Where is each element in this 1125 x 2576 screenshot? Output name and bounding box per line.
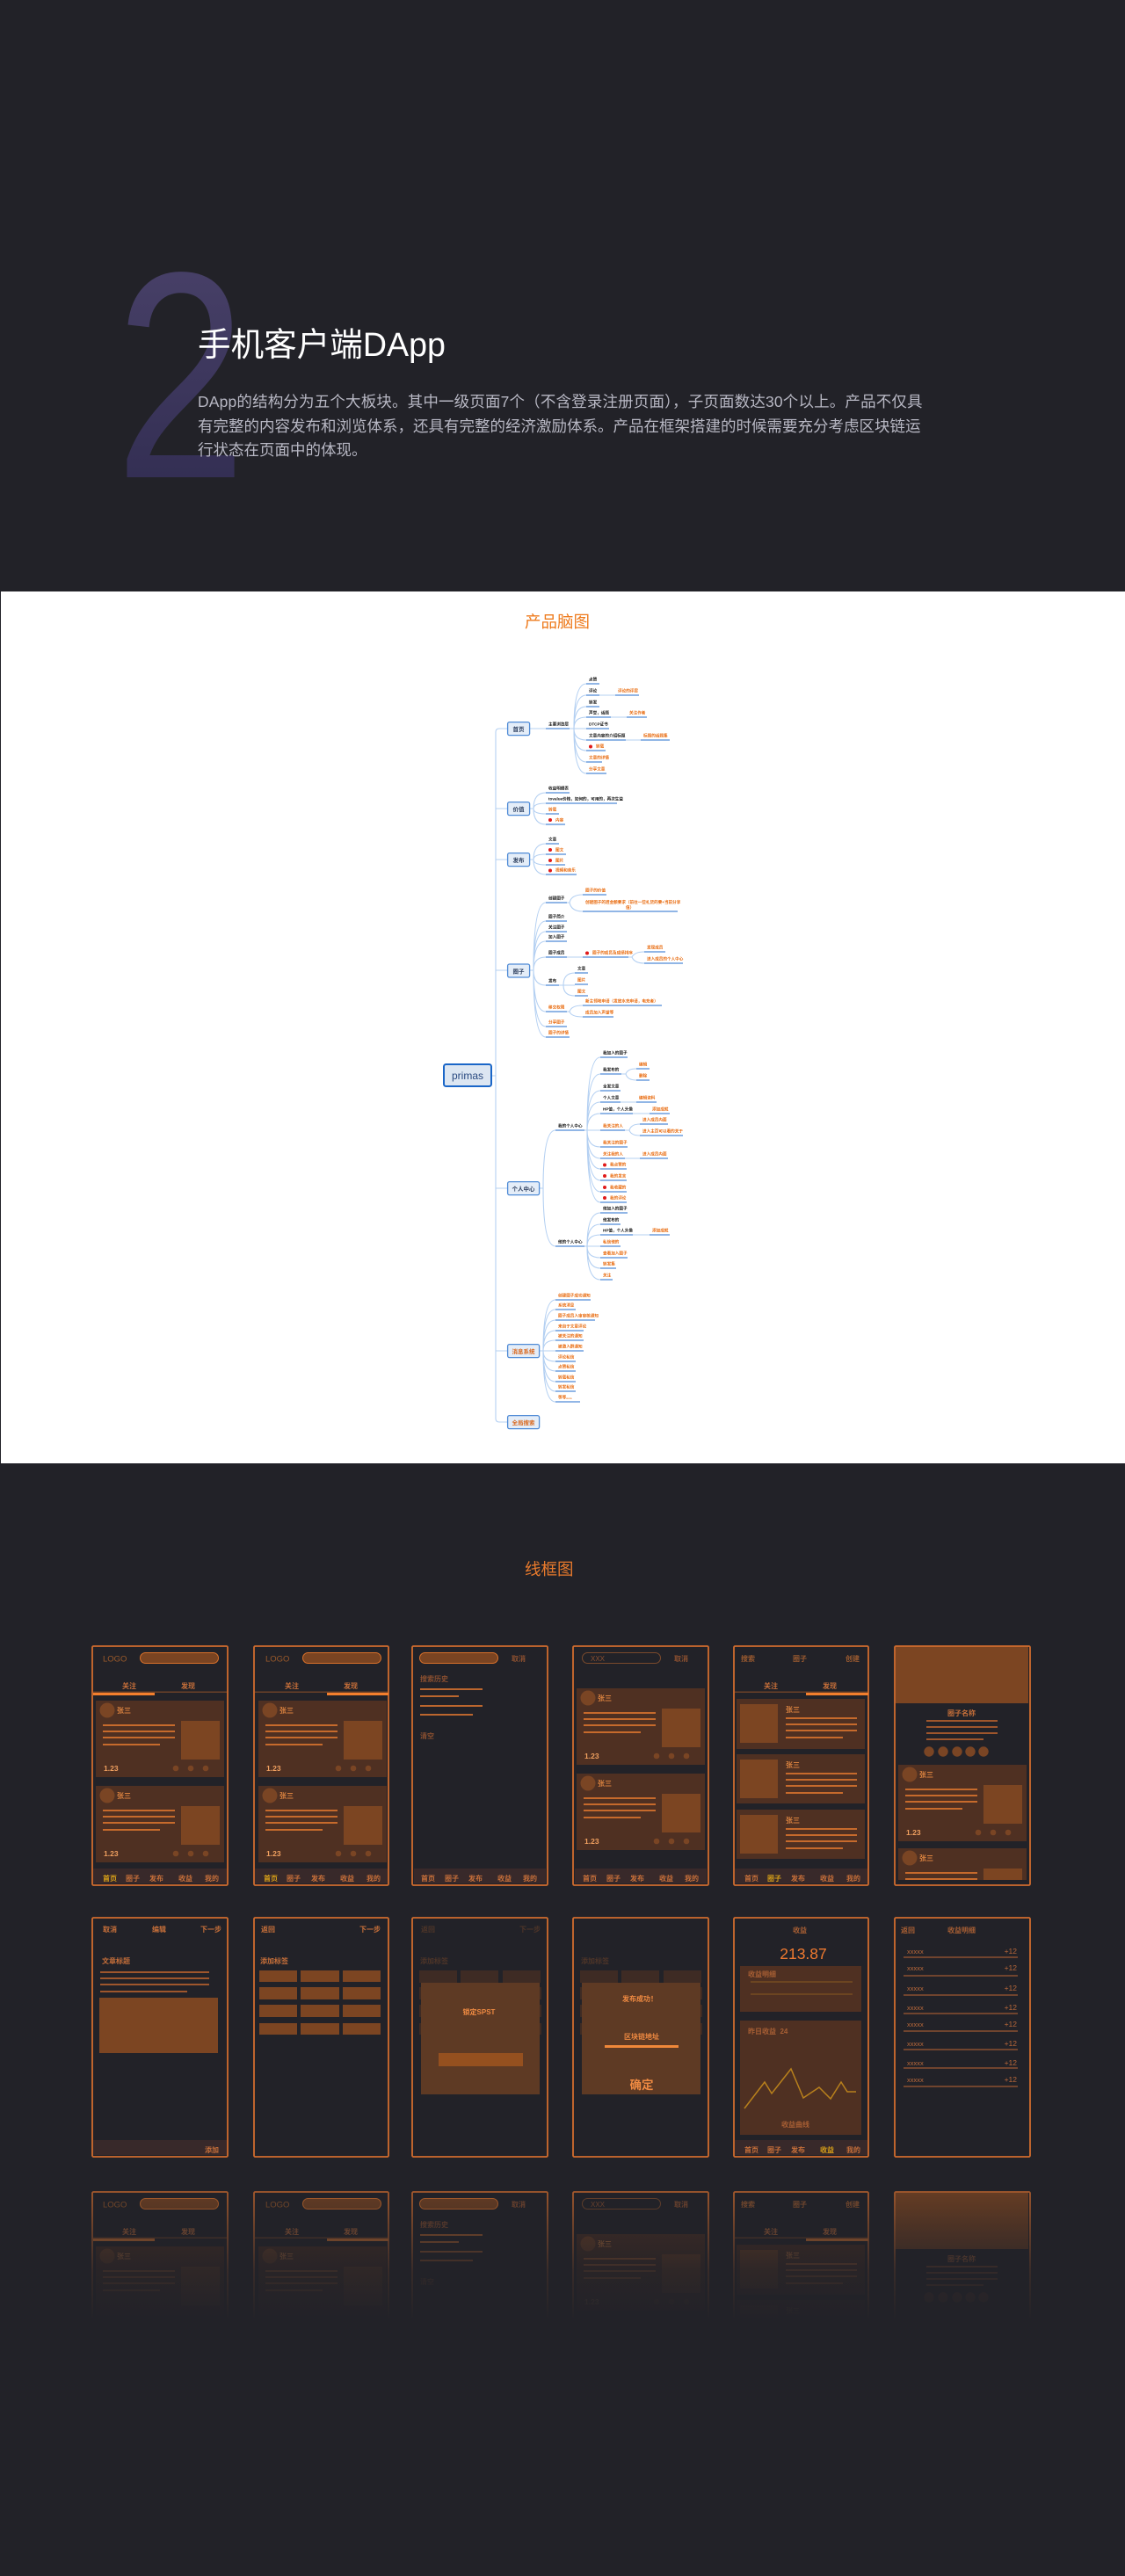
branch: personal center: 添加成就 xyxy=(652,1106,669,1113)
header section xyxy=(115,211,923,541)
bottom nav: 首页 xyxy=(421,1874,435,1883)
phone: circles list (faded): 搜索 xyxy=(741,2200,755,2209)
branch: personal center: 查看加入圈子 xyxy=(603,1250,628,1257)
branch: home: 主要浏览层 xyxy=(548,721,569,728)
branch: personal center: 关注我的人 xyxy=(603,1151,623,1157)
fade overlay xyxy=(79,2188,1046,2439)
intro paragraph: DApp的结构分为五个大板块。其中一级页面7个（不含登录注册页面），子页面数达30个以上。产品不仅具 xyxy=(198,393,923,410)
branch: circles: 新主领地申请（发放水充申请，电充者） xyxy=(585,998,658,1004)
phone: home follow tab (faded): LOGO xyxy=(103,2201,127,2210)
phone: home follow tab: 关注 xyxy=(122,1681,136,1690)
bottom nav xyxy=(735,1869,867,1883)
modal xyxy=(421,1983,540,2094)
branch: personal center: 删除 xyxy=(639,1072,648,1079)
phone: earnings detail list: 返回 xyxy=(901,1926,915,1934)
card: 张三 xyxy=(117,1792,131,1800)
branch: global search: 全局搜索 xyxy=(512,1419,535,1426)
phone: circles list: 关注 xyxy=(764,1681,778,1690)
rows: xxxxx xyxy=(907,2004,924,2012)
bottom nav: 收益 xyxy=(497,1874,512,1883)
rows: +12 xyxy=(1005,2020,1017,2028)
branch: personal center: 我的个人中心 xyxy=(558,1123,583,1128)
phone: search results xyxy=(573,1646,708,1885)
phone: add tags: 添加标签 xyxy=(260,1956,288,1965)
phone: circle detail: 圈子名称 xyxy=(947,1709,976,1717)
bottom nav: 我的 xyxy=(205,1874,219,1883)
branch: value: 价值 xyxy=(513,805,525,813)
branch: home: 文章内容的介绍标题 xyxy=(589,733,626,738)
branch: circles: 创建圈子 xyxy=(548,895,565,902)
phone: article editor: 文章标题 xyxy=(102,1956,130,1965)
branch: home: 评论 xyxy=(589,687,598,694)
branch: circles: 移交权限 xyxy=(548,1004,565,1011)
phone: search history: 清空 xyxy=(420,1731,434,1740)
phone: home discover tab: 关注 xyxy=(285,1681,299,1690)
phone: circle detail xyxy=(895,1646,1030,1885)
phone: home follow tab (faded): 发现 xyxy=(181,2227,195,2236)
branch: message system: 转载私信 xyxy=(558,1375,575,1380)
branch: home: 评论的评层 xyxy=(618,687,638,694)
mind map xyxy=(444,677,684,1429)
bottom nav: 圈子 xyxy=(287,1875,301,1883)
bottom nav: 发布 xyxy=(791,2145,805,2154)
branch: personal center: 我收藏的 xyxy=(610,1185,627,1190)
phone: earnings: 收益 xyxy=(793,1926,807,1934)
bottom nav: 首页 xyxy=(103,1874,117,1883)
rows: +12 xyxy=(1005,1963,1017,1972)
bottom nav: 首页 xyxy=(264,1874,278,1883)
branch: personal center: 个人文章 xyxy=(603,1095,620,1100)
bottom nav: 我的 xyxy=(367,1874,381,1883)
bottom nav: 圈子 xyxy=(767,2146,781,2154)
phone: home discover tab (faded): LOGO xyxy=(265,2201,289,2210)
phone: home discover tab: LOGO xyxy=(265,1654,289,1665)
bottom nav: 发布 xyxy=(311,1874,325,1883)
intro paragraph xyxy=(198,393,923,459)
bottom nav xyxy=(575,1869,707,1883)
phone: circles list (faded): 发现 xyxy=(823,2227,837,2236)
bottom nav: 我的 xyxy=(846,1874,860,1883)
branch: personal center: 关注 xyxy=(603,1273,612,1278)
phone: home discover tab (faded) xyxy=(254,2192,388,2431)
phone: home follow tab: 发现 xyxy=(181,1681,195,1690)
bottom nav: 首页 xyxy=(744,1874,758,1883)
wireframes row 3: fading repeat xyxy=(79,2188,1046,2439)
bottom nav: 首页 xyxy=(583,1874,597,1883)
branch: message system: 转发私信 xyxy=(558,1383,575,1390)
phone: circles list (faded): 张三 xyxy=(786,2307,800,2315)
phone: add tags: 返回 xyxy=(261,1925,275,1934)
branch: circles: 图文 xyxy=(577,988,586,995)
branch: home: 点赞 xyxy=(589,677,598,682)
bottom nav: 首页 xyxy=(744,2145,758,2154)
bottom nav: 收益 xyxy=(659,1874,673,1883)
branch: home: 分享文章 xyxy=(589,766,606,772)
circle card: 张三 xyxy=(786,1817,800,1825)
bottom nav: 我的 xyxy=(523,1874,537,1883)
card xyxy=(898,1765,1027,1841)
branch: publish: 视频和音乐 xyxy=(555,867,576,874)
big numeral 2: 2 xyxy=(115,211,246,541)
card: 张三 xyxy=(279,1792,294,1800)
card: 张三 xyxy=(279,1707,294,1715)
phone: search history (faded): 取消 xyxy=(512,2200,526,2209)
tag grid xyxy=(259,1970,381,2035)
dim tag grid xyxy=(580,1970,702,2035)
phone: circles list: 圈子 xyxy=(793,1655,807,1663)
rows: xxxxx xyxy=(907,1948,924,1956)
phone: search history xyxy=(412,1646,548,1885)
branch: personal center: 进入成员内面 xyxy=(642,1151,667,1157)
rows: +12 xyxy=(1005,1947,1017,1956)
wireframes row 2 xyxy=(92,1918,1030,2157)
branch: circles: 圈子成员 xyxy=(548,949,565,956)
phone: article editor xyxy=(92,1918,228,2157)
branch: circles: 创建圈子的准金额要求（前往一些礼货的要+当前分享 xyxy=(585,899,681,905)
bottom nav: 圈子 xyxy=(445,1875,459,1883)
phone: search results (faded): 1.23 xyxy=(584,2297,599,2306)
phone: home discover tab: 发现 xyxy=(344,1681,358,1690)
branch: personal center: 我关注的圈子 xyxy=(603,1139,628,1146)
rows: xxxxx xyxy=(907,1985,924,1992)
card xyxy=(96,1701,224,1777)
phone: publish success modal xyxy=(573,1918,708,2157)
phone: add tags: 下一步 xyxy=(359,1925,381,1934)
branch: circles: 圈子的价值 xyxy=(585,888,606,893)
bottom nav: 发布 xyxy=(791,1874,805,1883)
branch: message system: 消息系统 xyxy=(512,1347,535,1355)
rows: xxxxx xyxy=(907,2076,924,2084)
branch: personal center: 编辑 xyxy=(639,1062,648,1067)
branch: circles: 圈子简介 xyxy=(548,914,565,919)
branch: circles: 加入圈子 xyxy=(548,933,565,940)
bottom nav: 收益 xyxy=(340,1874,354,1883)
phone: search results (faded): 取消 xyxy=(674,2200,688,2209)
phone: circle detail (faded) xyxy=(895,2192,1030,2431)
branch: personal center: 他发布的 xyxy=(603,1216,620,1223)
panel: white mind map background xyxy=(1,591,1125,1463)
phone: search history (faded): 清空 xyxy=(420,2277,434,2286)
phone: search results (faded): XXX xyxy=(591,2201,606,2209)
branch: home: 转发 xyxy=(589,700,598,705)
phone: earnings detail list xyxy=(895,1918,1030,2157)
rows: xxxxx xyxy=(907,2040,924,2048)
branch: personal center: 我的发言 xyxy=(610,1172,627,1179)
card xyxy=(577,1774,705,1850)
bottom nav xyxy=(255,1869,388,1883)
branch: value: 内容 xyxy=(555,817,564,823)
modal: 锁定SPST xyxy=(463,2007,496,2016)
branch: message system: 被邀入群通知 xyxy=(558,1343,583,1350)
phone: home discover tab (faded): 发现 xyxy=(344,2227,358,2236)
phone: circles list: 创建 xyxy=(846,1654,860,1663)
earnings detail card xyxy=(740,1966,861,2012)
trunk connector xyxy=(492,729,507,1422)
heading: product mind map: 产品脑图 xyxy=(525,613,590,631)
branch: home: 首页 xyxy=(513,725,525,733)
branch: personal center: 他加入的圈子 xyxy=(603,1206,628,1211)
bottom nav: 圈子 xyxy=(126,1875,140,1883)
branch: circles: 发布 xyxy=(548,977,557,984)
rows: +12 xyxy=(1005,2075,1017,2084)
branch: circles: 进入成员的个人中心 xyxy=(647,956,684,961)
bottom nav: 圈子 xyxy=(606,1875,621,1883)
rows: +12 xyxy=(1005,2003,1017,2012)
card xyxy=(577,1688,705,1765)
clipped card xyxy=(898,1848,1027,1880)
branch: circles: 关注圈子 xyxy=(548,925,565,930)
phone: earnings detail list: 收益明细 xyxy=(947,1926,976,1934)
phone: search results (faded): 张三 xyxy=(598,2240,612,2248)
clipped card: 张三 xyxy=(919,1854,933,1862)
bottom toolbar xyxy=(93,2140,227,2155)
phone: article editor: 取消 xyxy=(103,1925,117,1934)
phone: publish success modal: 添加标签 xyxy=(581,1956,609,1965)
branch: message system: 被关注的通知 xyxy=(558,1332,583,1339)
bottom nav xyxy=(414,1869,546,1883)
phone: circles list (faded): 张三 xyxy=(786,2252,800,2260)
modal: 发布成功！ xyxy=(622,1994,657,2003)
branch: home: 文章的详情 xyxy=(589,754,609,761)
branch: publish xyxy=(508,837,577,874)
root node primas: primas xyxy=(452,1070,483,1082)
branch: home: 转载 xyxy=(596,744,605,749)
phone: circles list (faded): 圈子 xyxy=(793,2201,807,2209)
phone: earnings xyxy=(734,1918,868,2157)
bottom nav: 发布 xyxy=(149,1874,163,1883)
bottom nav xyxy=(93,1869,227,1883)
phone: article editor: 下一步 xyxy=(200,1925,221,1934)
card xyxy=(96,1786,224,1862)
branch: personal center: 他的个人中心 xyxy=(558,1239,583,1244)
heading: wireframes: 线框图 xyxy=(525,1560,574,1578)
branch: personal center: 我点赞的 xyxy=(610,1162,627,1167)
circle card xyxy=(737,1810,865,1859)
rows: xxxxx xyxy=(907,2021,924,2028)
phone: home discover tab (faded): 张三 xyxy=(279,2253,294,2260)
bottom nav: 圈子 xyxy=(767,1875,781,1883)
title: 手机客户端DApp xyxy=(198,326,446,363)
branch: circles: 成员加入声望等 xyxy=(585,1009,614,1016)
card: 1.23 xyxy=(584,1752,599,1760)
bottom nav: 收益 xyxy=(178,1874,192,1883)
branch: value: 转载 xyxy=(548,807,557,812)
branch: circles xyxy=(508,888,684,1037)
branch: personal center: HP值，个人头像 xyxy=(603,1106,633,1113)
card xyxy=(258,1786,387,1862)
bottom nav: 我的 xyxy=(685,1874,699,1883)
branch: personal center: 我的评论 xyxy=(610,1195,627,1201)
branch: home: 标题的话题集 xyxy=(643,733,668,738)
branch: personal center: 全发文章 xyxy=(603,1083,620,1090)
branch: message system: 圈子成员入审审核通知 xyxy=(558,1313,599,1318)
branch: personal center: 我发布的 xyxy=(603,1067,620,1072)
branch: message system: 评论私信 xyxy=(558,1353,575,1361)
rows: xxxxx xyxy=(907,2059,924,2067)
branch: publish: 文章 xyxy=(548,837,557,842)
phone: circles list (faded): 创建 xyxy=(846,2200,860,2209)
branch: home xyxy=(508,677,670,773)
card: 张三 xyxy=(919,1771,933,1779)
branch: message system: 创建圈子成功通知 xyxy=(558,1292,591,1299)
earnings detail card: 收益明细 xyxy=(748,1970,776,1978)
card: 1.23 xyxy=(266,1849,281,1858)
branch: global search xyxy=(508,1416,540,1429)
card: 1.23 xyxy=(906,1828,921,1837)
phone: circles list (faded): 关注 xyxy=(764,2227,778,2236)
modal: 区块链地址 xyxy=(624,2032,659,2041)
branch: message system: 来自于文章评论 xyxy=(558,1324,587,1329)
rows: xxxxx xyxy=(907,1964,924,1972)
phone: circle detail (faded): 圈子名称 xyxy=(947,2254,976,2263)
branch: home: DTCP证书 xyxy=(589,721,608,728)
card: 1.23 xyxy=(584,1837,599,1846)
branch: message system xyxy=(508,1292,599,1402)
phone: search results: 取消 xyxy=(674,1654,688,1663)
intro paragraph: 有完整的内容发布和浏览体系，还具有完整的经济激励体系。产品在框架搭建的时候需要充分考虑区块链运 xyxy=(198,417,921,435)
branch: personal center: 添加成就 xyxy=(652,1227,669,1234)
circle card xyxy=(737,1754,865,1803)
branch: home: 声誉，话题 xyxy=(589,710,609,715)
intro paragraph: 行状态在页面中的体现。 xyxy=(198,441,367,459)
card: 张三 xyxy=(598,1780,612,1788)
branch: value xyxy=(508,786,623,824)
branch: personal center: 进入成员内面 xyxy=(642,1116,667,1123)
phone: article editor: 编辑 xyxy=(152,1925,166,1934)
wireframes row 1 xyxy=(92,1646,1030,1885)
phone: search results: XXX xyxy=(591,1655,606,1663)
bottom nav: 发布 xyxy=(630,1874,644,1883)
rows xyxy=(904,1947,1018,2086)
branch: personal center: 我加入的圈子 xyxy=(603,1049,628,1056)
branch: personal center: 编辑资料 xyxy=(639,1095,656,1100)
branch: message system: 系统消息 xyxy=(558,1303,575,1308)
branch: personal center: 转发集 xyxy=(603,1260,615,1267)
circle card: 张三 xyxy=(786,1706,800,1714)
branch: personal center: 进入主页可以看的关于 xyxy=(642,1128,683,1134)
branch: home: 关注作者 xyxy=(629,710,646,715)
card xyxy=(258,1701,387,1777)
phone: lock SPST modal xyxy=(412,1918,548,2157)
phone: lock SPST modal: 下一步 xyxy=(519,1925,541,1934)
card: 1.23 xyxy=(104,1764,119,1773)
branch: publish: 图文 xyxy=(555,847,564,853)
phone: add tags xyxy=(254,1918,388,2157)
branch: circles: 值） xyxy=(626,904,634,911)
dim tag grid xyxy=(419,1970,541,2035)
phone: home follow tab (faded) xyxy=(92,2192,228,2431)
phone: circles list (faded) xyxy=(734,2192,868,2431)
card: 1.23 xyxy=(266,1764,281,1773)
branch: value: tovalue价格，如何的，可用的，再次生益 xyxy=(548,796,623,802)
phone: home follow tab: LOGO xyxy=(103,1654,127,1665)
circle card xyxy=(737,1699,865,1749)
rows: +12 xyxy=(1005,2039,1017,2048)
branch: personal center: 私信他的 xyxy=(603,1239,620,1244)
bottom nav: 发布 xyxy=(468,1874,483,1883)
phone: search history: 搜索历史 xyxy=(420,1674,448,1683)
bottom nav: 收益 xyxy=(820,2145,834,2154)
phone: home follow tab xyxy=(92,1646,228,1885)
card: 张三 xyxy=(598,1694,612,1702)
branch: circles: 圈子的详情 xyxy=(548,1030,569,1035)
branch: circles: 分享圈子 xyxy=(548,1020,565,1025)
branch: publish: 图片 xyxy=(555,858,564,863)
branch: circles: 文章 xyxy=(577,965,586,972)
bottom nav: 收益 xyxy=(820,1874,834,1883)
earnings chart card: 昨日收益 24 xyxy=(748,2027,788,2035)
phone: lock SPST modal: 添加标签 xyxy=(420,1956,448,1965)
phone: home follow tab (faded): 关注 xyxy=(122,2227,136,2236)
branch: value: 收益明细表 xyxy=(548,786,569,791)
root node primas xyxy=(444,1064,491,1086)
modal xyxy=(582,1983,700,2094)
branch: circles: 圈子 xyxy=(513,969,525,976)
earnings chart card xyxy=(740,2021,861,2135)
phone: home discover tab (faded): 关注 xyxy=(285,2227,299,2236)
phone: search history (faded): 搜索历史 xyxy=(420,2220,448,2229)
branch: publish: 发布 xyxy=(513,856,525,864)
card: 张三 xyxy=(117,1707,131,1715)
phone: home follow tab (faded): 张三 xyxy=(117,2253,131,2260)
branch: message system: 等等。。。 xyxy=(558,1394,574,1399)
phone: search results (faded) xyxy=(573,2192,708,2431)
phone: lock SPST modal: 返回 xyxy=(421,1925,435,1934)
earnings chart card: 收益曲线 xyxy=(781,2120,809,2129)
rows: +12 xyxy=(1005,1984,1017,1992)
bottom nav xyxy=(735,2140,867,2155)
circle card: 张三 xyxy=(786,1761,800,1769)
modal: 确定 xyxy=(629,2078,654,2092)
bottom nav: 我的 xyxy=(846,2145,860,2154)
branch: personal center: 我关注的人 xyxy=(603,1123,623,1128)
phone: circles list xyxy=(734,1646,868,1885)
phone: home discover tab xyxy=(254,1646,388,1885)
branch: personal center: HP值，个人头像 xyxy=(603,1227,633,1234)
bottom toolbar: 添加 xyxy=(205,2145,219,2154)
phone: earnings: 213.87 xyxy=(780,1945,827,1963)
phone: search history (faded) xyxy=(412,2192,548,2431)
branch: circles: 发现成员 xyxy=(647,944,664,951)
card: 1.23 xyxy=(104,1849,119,1858)
phone: circles list: 搜索 xyxy=(741,1654,755,1663)
branch: message system: 点赞私信 xyxy=(558,1364,575,1369)
branch: personal center xyxy=(508,1049,683,1280)
phone: circles list: 发现 xyxy=(823,1681,837,1690)
branch: circles: 图片 xyxy=(577,977,586,983)
rows: +12 xyxy=(1005,2058,1017,2067)
phone: search history: 取消 xyxy=(512,1654,526,1663)
branch: personal center: 个人中心 xyxy=(512,1185,535,1193)
branch: circles: 圈子的成员及成绩排序 xyxy=(592,949,633,956)
